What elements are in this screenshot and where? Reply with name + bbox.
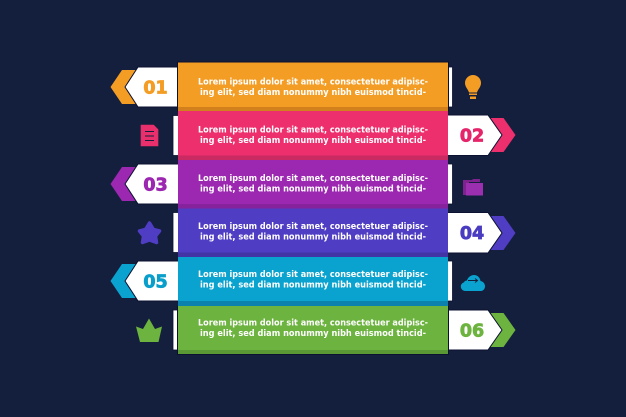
banner 2: Lorem ipsum dolor sit amet, consectetuer adipisc- <box>198 126 428 136</box>
row 3 right strip and folder icon <box>447 164 483 204</box>
banner 2 <box>178 111 448 160</box>
banner 1: Lorem ipsum dolor sit amet, consectetuer adipisc- <box>198 78 428 88</box>
row 2 tab: 02 <box>447 115 516 156</box>
row 4 tab: 04 <box>447 212 516 253</box>
row 3 tab: 03 <box>110 164 179 204</box>
banner 4: ing elit, sed diam nonummy nibh euismod tincid- <box>200 232 426 242</box>
row 3 tab: 03: 03 <box>143 176 168 196</box>
row 4 left strip and star icon <box>140 212 179 252</box>
row 2 tab: 02: 02 <box>460 126 484 146</box>
row 6 tab: 06: 06 <box>460 322 484 342</box>
banner 5: ing elit, sed diam nonummy nibh euismod tincid- <box>200 281 426 291</box>
row 1 tab: 01 <box>110 67 179 107</box>
banner 1 <box>177 62 449 112</box>
banner 6 <box>177 306 449 355</box>
banner 6: ing elit, sed diam nonummy nibh euismod tincid- <box>200 329 426 339</box>
banner 3: Lorem ipsum dolor sit amet, consectetuer adipisc- <box>198 174 428 184</box>
row 5 right strip and cloud icon <box>447 261 485 301</box>
banner 4 <box>178 208 448 257</box>
banner 6: Lorem ipsum dolor sit amet, consectetuer adipisc- <box>198 318 428 328</box>
banner 3: ing elit, sed diam nonummy nibh euismod tincid- <box>200 184 426 194</box>
banner 2: ing elit, sed diam nonummy nibh euismod tincid- <box>200 136 426 146</box>
row 1 tab: 01: 01 <box>143 78 168 98</box>
banner 4: Lorem ipsum dolor sit amet, consectetuer adipisc- <box>198 222 428 232</box>
row 2 left strip and document icon <box>141 116 179 156</box>
row 6 tab: 06 <box>447 310 516 350</box>
banner 1: ing elit, sed diam nonummy nibh euismod tincid- <box>200 88 426 98</box>
row 5 tab: 05 <box>110 261 179 301</box>
row 1 right strip and bulb icon <box>447 67 481 107</box>
row 6 left strip and crown icon <box>136 310 179 350</box>
row 4 tab: 04: 04 <box>460 224 484 244</box>
row 5 tab: 05: 05 <box>143 272 168 292</box>
banner 5 <box>178 257 448 306</box>
banner 5: Lorem ipsum dolor sit amet, consectetuer adipisc- <box>198 270 428 280</box>
banner 3 <box>178 160 448 208</box>
